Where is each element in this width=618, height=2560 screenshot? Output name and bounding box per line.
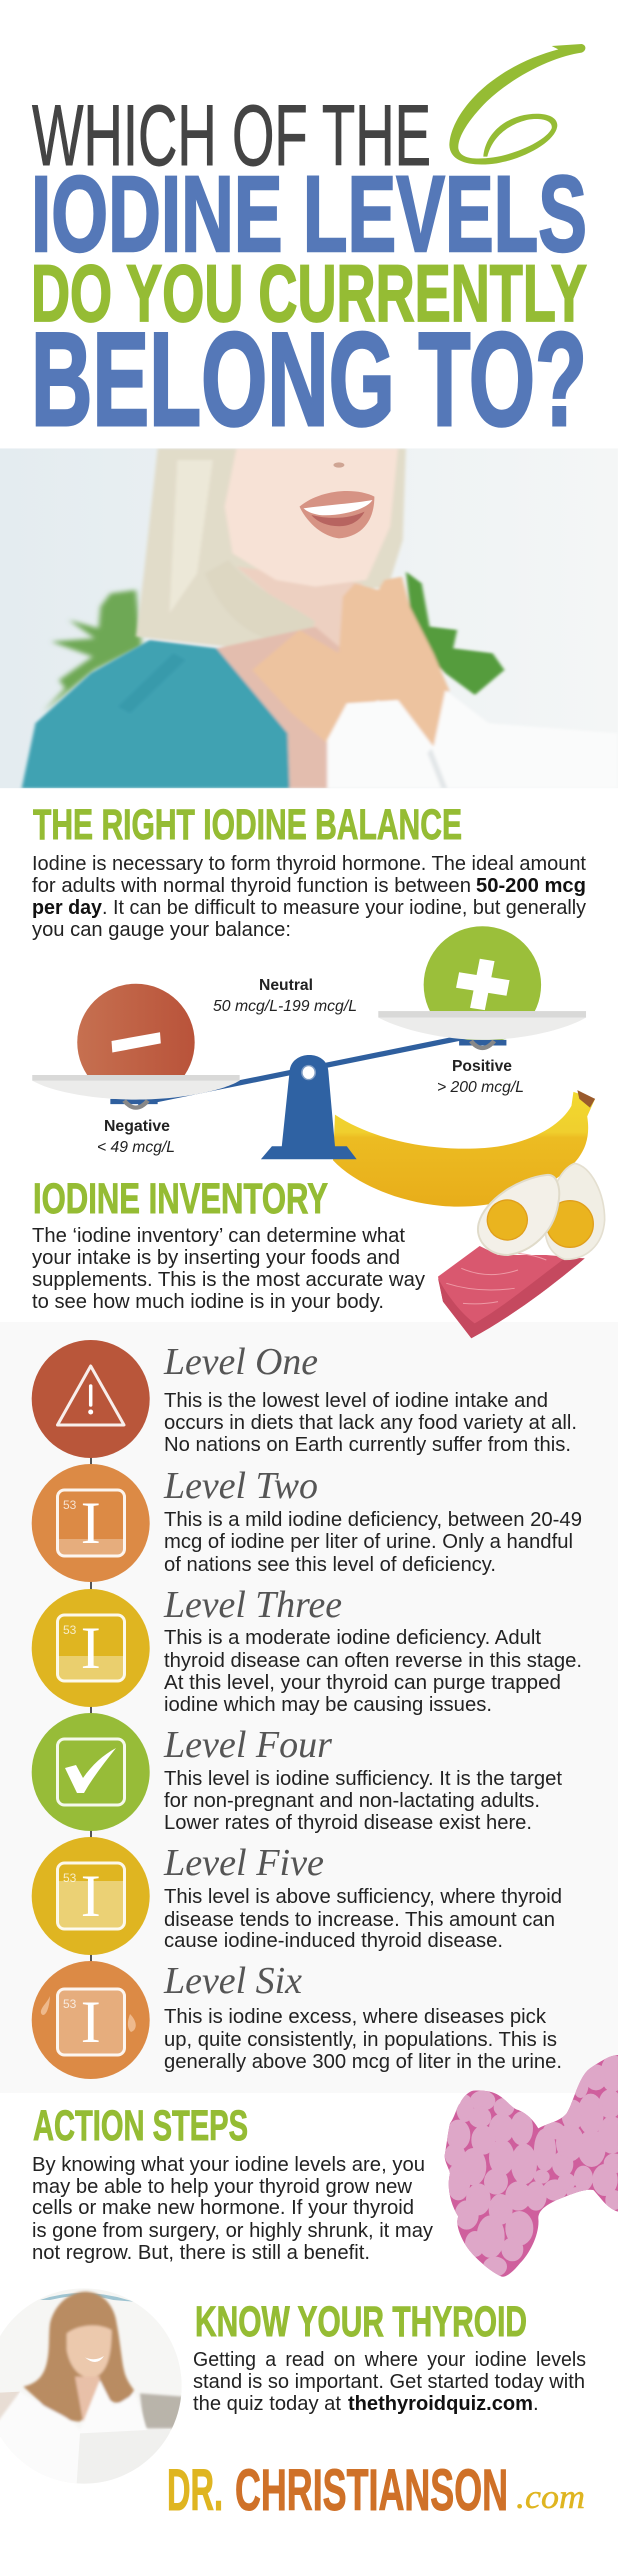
description bbox=[164, 1626, 582, 1716]
negative weight bbox=[77, 984, 195, 1101]
connector line between level circles bbox=[90, 1440, 92, 2040]
description: thyroid disease can often reverse in this stage. bbox=[164, 1649, 582, 1672]
icon: warning triangle bbox=[32, 1340, 150, 1458]
illustration: banana bbox=[333, 1090, 595, 1207]
logo: dr christianson: DR. bbox=[167, 2458, 223, 2523]
heading: ACTION STEPS bbox=[33, 2102, 248, 2150]
logo: dr christianson: .com bbox=[516, 2479, 585, 2516]
portrait photo: Dr. Christianson bbox=[0, 2287, 187, 2493]
description bbox=[164, 1389, 577, 1456]
positive weight bbox=[424, 926, 541, 1043]
description: cause iodine-induced thyroid disease. bbox=[164, 1929, 503, 1952]
scale labels: Negative bbox=[104, 1118, 170, 1135]
illustration: meat and eggs bbox=[438, 1163, 605, 1338]
description: Lower rates of thyroid disease exist here. bbox=[164, 1811, 532, 1834]
paragraph: may be able to help your thyroid grow new bbox=[32, 2175, 412, 2198]
paragraph: By knowing what your iodine levels are, you bbox=[32, 2153, 425, 2176]
icon: iodine element low fill bbox=[32, 1464, 150, 1582]
description: This level is above sufficiency, where thyroid bbox=[164, 1885, 562, 1908]
paragraph: is gone from surgery, or highly shrunk, it may bbox=[32, 2219, 434, 2242]
illustration: thyroid gland bbox=[440, 2050, 618, 2283]
icon: iodine element low fill: 53 bbox=[63, 1498, 77, 1512]
scale labels: Positive bbox=[452, 1058, 512, 1075]
level six bbox=[32, 1960, 562, 2079]
paragraph: the quiz today at bbox=[193, 2392, 341, 2415]
description: for non-pregnant and non-lactating adults. bbox=[164, 1789, 540, 1812]
paragraph: per day bbox=[32, 896, 103, 919]
description bbox=[164, 1767, 562, 1834]
description: disease tends to increase. This amount can bbox=[164, 1908, 555, 1931]
level two bbox=[32, 1464, 582, 1582]
description bbox=[164, 1508, 582, 1576]
paragraph: stand is so important. Get started today with bbox=[193, 2370, 585, 2393]
paragraph: for adults with normal thyroid function is between bbox=[32, 874, 471, 897]
level four bbox=[32, 1713, 562, 1834]
description: of nations see this level of deficiency. bbox=[164, 1553, 496, 1576]
icon: iodine element overflowing: 53 bbox=[63, 1997, 77, 2011]
paragraph: . bbox=[533, 2392, 539, 2415]
title bbox=[31, 44, 587, 454]
scale labels: < 49 mcg/L bbox=[97, 1139, 175, 1156]
description bbox=[164, 1885, 562, 1952]
panel: iodine levels background bbox=[0, 1322, 618, 2093]
paragraph: not regrow. But, there is still a benefit. bbox=[32, 2241, 370, 2264]
icon: iodine element overflowing bbox=[32, 1961, 150, 2079]
paragraph: you can gauge your balance: bbox=[32, 918, 291, 941]
level name: Level Three bbox=[163, 1584, 342, 1626]
icon: iodine element high fill: 53 bbox=[63, 1871, 77, 1885]
level name: Level Two bbox=[163, 1465, 318, 1507]
description: This is a mild iodine deficiency, between 20-49 bbox=[164, 1508, 582, 1531]
paragraph bbox=[32, 2153, 434, 2264]
level name: Level Five bbox=[163, 1842, 324, 1884]
icon: iodine element half fill: 53 bbox=[63, 1623, 77, 1637]
scale labels: Neutral bbox=[259, 977, 313, 994]
scale labels bbox=[97, 977, 524, 1156]
description bbox=[164, 2005, 562, 2073]
paragraph: Iodine is necessary to form thyroid hormone. The ideal amount bbox=[32, 852, 586, 875]
description: This is a moderate iodine deficiency. Adult bbox=[164, 1626, 541, 1649]
description: up, quite consistently, in populations. This is bbox=[164, 2028, 557, 2051]
section: the right iodine balance bbox=[32, 801, 587, 941]
scale labels: > 200 mcg/L bbox=[437, 1079, 524, 1096]
paragraph: to see how much iodine is in your body. bbox=[32, 1290, 384, 1313]
paragraph: supplements. This is the most accurate way bbox=[32, 1268, 426, 1291]
level name: Level Six bbox=[163, 1960, 302, 2002]
paragraph: 50-200 mcg bbox=[476, 874, 586, 897]
description: This level is iodine sufficiency. It is the target bbox=[164, 1767, 562, 1790]
paragraph: your intake is by inserting your foods and bbox=[32, 1246, 400, 1269]
description: occurs in diets that lack any food variety at all. bbox=[164, 1411, 577, 1434]
level name: Level One bbox=[163, 1341, 318, 1383]
paragraph: thethyroidquiz.com bbox=[348, 2392, 533, 2415]
section: action steps bbox=[32, 2102, 434, 2264]
section: know your thyroid bbox=[193, 2298, 586, 2415]
hero photo: doctor examining a woman's throat bbox=[0, 448, 618, 788]
paragraph bbox=[193, 2348, 586, 2415]
heading: IODINE INVENTORY bbox=[33, 1175, 328, 1223]
paragraph bbox=[32, 852, 587, 941]
icon: iodine element high fill bbox=[32, 1837, 150, 1955]
description: mcg of iodine per liter of urine. Only a handful bbox=[164, 1530, 573, 1553]
paragraph: . It can be difficult to measure your iodine, but generally bbox=[102, 896, 587, 919]
section: iodine inventory bbox=[32, 1175, 426, 1313]
paragraph bbox=[32, 1224, 426, 1313]
paragraph: The ‘iodine inventory’ can determine what bbox=[32, 1224, 405, 1247]
title number: hand-drawn 6 bbox=[449, 44, 585, 164]
icon: iodine element half fill: I bbox=[81, 1615, 101, 1681]
description: No nations on Earth currently suffer from this. bbox=[164, 1433, 571, 1456]
icon: check mark bbox=[32, 1713, 150, 1831]
paragraph: cells or make new hormone. If your thyroid bbox=[32, 2196, 414, 2219]
description: At this level, your thyroid can purge trapped bbox=[164, 1671, 561, 1694]
description: generally above 300 mcg of liter in the urine. bbox=[164, 2050, 562, 2073]
description: This is the lowest level of iodine intake and bbox=[164, 1389, 548, 1412]
icon: iodine element overflowing: I bbox=[81, 1989, 101, 2055]
illustration: balance scale bbox=[32, 926, 586, 1159]
level three bbox=[32, 1584, 582, 1716]
description: This is iodine excess, where diseases pick bbox=[164, 2005, 547, 2028]
scale labels: 50 mcg/L-199 mcg/L bbox=[213, 998, 357, 1015]
paragraph: Getting a read on where your iodine levels bbox=[193, 2348, 586, 2371]
description: iodine which may be causing issues. bbox=[164, 1693, 492, 1716]
level five bbox=[32, 1837, 562, 1955]
icon: iodine element low fill: I bbox=[81, 1490, 101, 1556]
level one bbox=[32, 1340, 577, 1458]
icon: iodine element half fill bbox=[32, 1589, 150, 1707]
level name: Level Four bbox=[163, 1724, 332, 1766]
icon: iodine element high fill: I bbox=[81, 1863, 101, 1929]
